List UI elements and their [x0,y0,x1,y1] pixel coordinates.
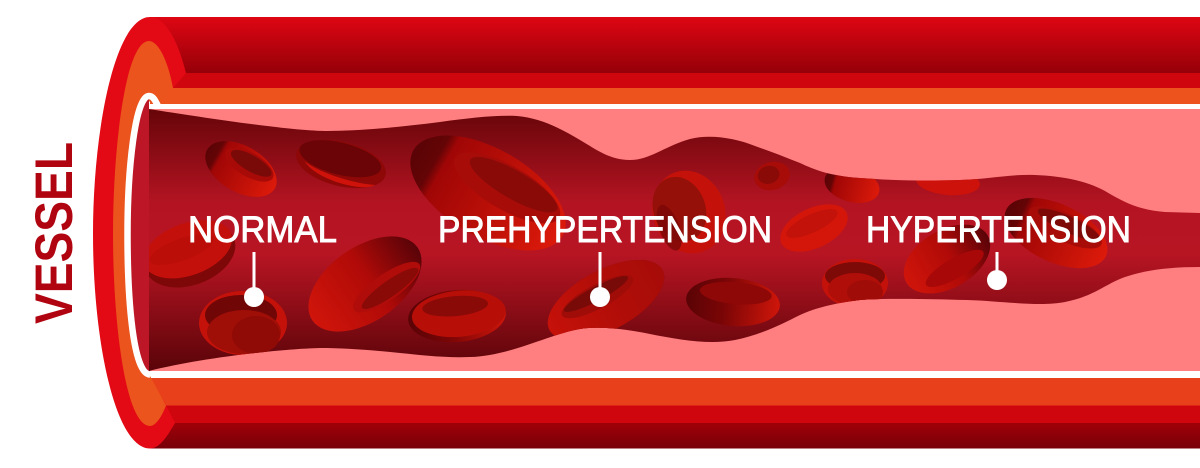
cell 14 [408,290,506,342]
label: prehypertension: PREHYPERTENSION [438,209,772,250]
cell 3 [410,136,566,250]
cell 5 [754,162,790,190]
cell 17 [149,220,236,288]
marker: prehypertension [590,252,610,307]
cell 1 [205,141,277,197]
cell 11 [822,259,888,307]
cell 15 [308,236,422,332]
cell 4 [652,170,726,254]
cell 12 [548,260,664,336]
cell 8 [916,179,980,196]
inner lip [129,96,149,374]
red blood cells [149,136,1108,355]
vessel outer rim [93,17,186,448]
cell 16 [199,291,287,355]
label: hypertension: HYPERTENSION [866,209,1131,250]
cell 9 [1004,198,1108,268]
vessel orange rim [113,41,173,426]
cell 7 [824,173,880,203]
white inner wall [128,96,158,374]
marker: hypertension [987,252,1007,290]
marker: normal [244,252,264,307]
cell 6 [780,204,848,252]
blood flow [149,109,1200,371]
cell 13 [686,278,780,326]
label: vessel: VESSEL [25,142,84,324]
cell 10 [904,224,990,294]
cell 2 [296,140,386,188]
label: normal: NORMAL [188,209,337,250]
